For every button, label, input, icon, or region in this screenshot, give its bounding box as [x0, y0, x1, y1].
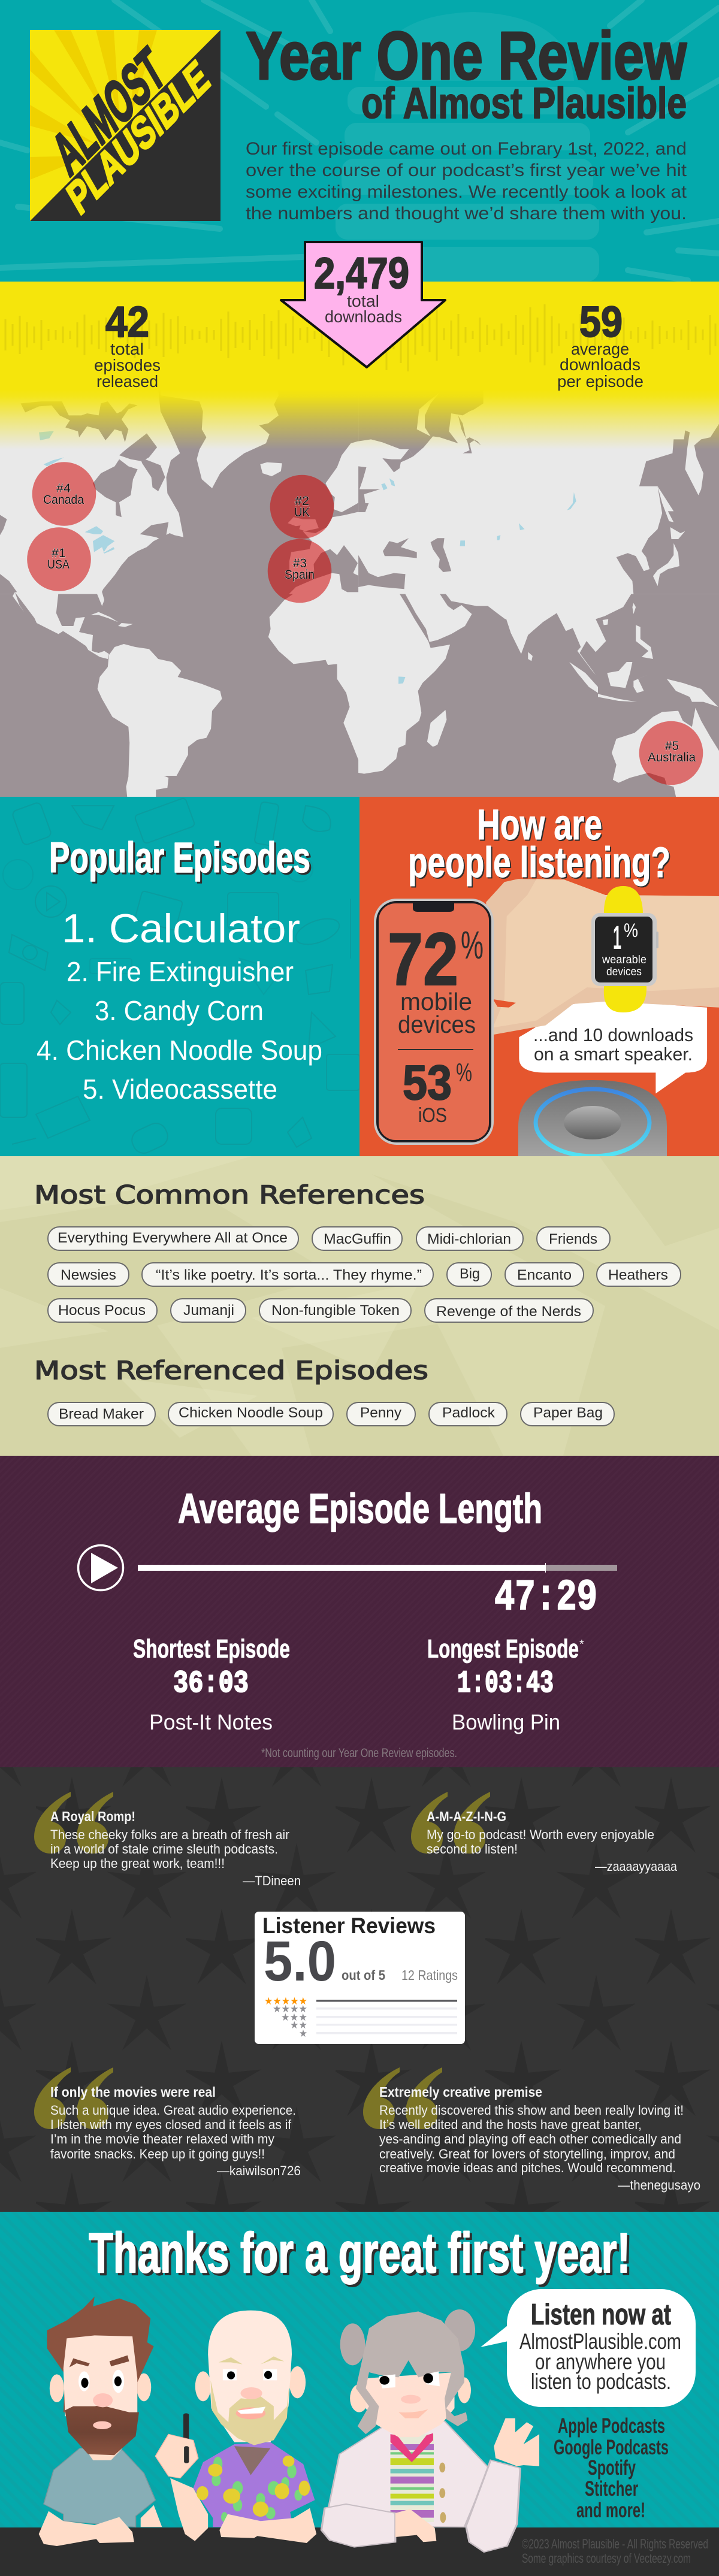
- pills: most referenced episodes: Chicken Noodle Soup: [179, 1405, 323, 1421]
- stat: 53 percent iOS: %: [456, 1059, 472, 1087]
- intro paragraph: the numbers and thought we’d share them with you.: [246, 204, 687, 223]
- review: A-M-A-Z-I-N-G: [411, 1792, 678, 1874]
- footer: [0, 2527, 719, 2576]
- intro paragraph: over the course of our podcast’s first year we’ve hit: [246, 161, 687, 180]
- stat: average downloads: 59: [579, 298, 623, 346]
- review: A Royal Romp: in a world of stale crime sleuth podcasts.: [50, 1842, 278, 1857]
- review: Extremely creative premise: Recently discovered this show and been really loving it!: [379, 2103, 684, 2118]
- episode ranking list: 2. Fire Extinguisher: [67, 956, 294, 987]
- review: Extremely creative premise: [363, 2067, 700, 2193]
- map marker: USA: [27, 527, 91, 591]
- arrow: total downloads: [281, 242, 445, 367]
- podcast platforms: Stitcher: [585, 2477, 638, 2501]
- stat: longest episode: Longest Episode: [427, 1634, 579, 1664]
- stat: average downloads: downloads: [560, 355, 641, 374]
- review: A-M-A-Z-I-N-G: second to listen!: [427, 1842, 518, 1857]
- intro paragraph: Our first episode came out on Febrary 1st, 2022, and: [246, 139, 687, 159]
- review: A Royal Romp: —TDineen: [243, 1873, 301, 1888]
- review: If only the movies were real: I’m in the movie theater relaxed with my: [50, 2131, 274, 2146]
- podcast platforms: and more!: [576, 2499, 645, 2522]
- panel: yellow stats band: [0, 282, 719, 391]
- pills: most referenced episodes: Paper Bag: [533, 1405, 603, 1421]
- pills: most common references: Revenge of the Nerds: [436, 1304, 581, 1320]
- pills: most referenced episodes: [48, 1402, 614, 1426]
- stat: 53 percent iOS: 53: [403, 1056, 452, 1110]
- pills: most common references: “It’s like poetry. It’s sorta... They rhyme.”: [156, 1267, 422, 1283]
- review: A-M-A-Z-I-N-G: A-M-A-Z-I-N-G: [427, 1809, 506, 1824]
- map marker: UK: UK: [294, 506, 310, 519]
- stat: total episodes: episodes: [94, 356, 161, 374]
- episode ranking list: 5. Videocassette: [83, 1074, 277, 1105]
- stat: 72 percent mobile: [388, 918, 484, 1038]
- stat: 72 percent mobile: devices: [398, 1011, 476, 1038]
- review: If only the movies were real: favorite snacks. Keep up it going guys!!: [50, 2146, 265, 2161]
- map marker: Australia: [639, 721, 703, 785]
- heading: average episode length: Average Episode Length: [178, 1485, 542, 1532]
- map marker: Canada: [32, 462, 96, 526]
- pills: most common references: MacGuffin: [324, 1231, 391, 1247]
- panel: popular episodes: [0, 797, 360, 1157]
- stat: 72 percent mobile: %: [461, 923, 484, 967]
- panel: thanks: [0, 2212, 719, 2527]
- logo: [30, 30, 220, 225]
- review: If only the movies were real: [34, 2067, 301, 2178]
- panel: header: [0, 0, 719, 282]
- pills: most common references: Non-fungible Token: [271, 1302, 400, 1319]
- ratings card: ★★★: [281, 2012, 307, 2024]
- pills: most common references: Everything Everywhere All at Once: [58, 1230, 288, 1246]
- illustration: host with purple shirt: [155, 2311, 316, 2543]
- heading: how are people listening: How are: [477, 802, 602, 849]
- stat: 53 percent iOS: [403, 1056, 472, 1127]
- map marker: Australia: #5: [665, 739, 679, 753]
- review: Extremely creative premise: It’s well edited and the hosts have great banter,: [379, 2117, 642, 2132]
- logo: PLAUSIBLE: [61, 51, 216, 225]
- ratings card: 12 Ratings: [401, 1967, 458, 1983]
- episode ranking list: 1. Calculator: [62, 906, 300, 951]
- map marker: UK: [270, 475, 334, 539]
- stat: shortest episode: Post-It Notes: [149, 1710, 273, 1734]
- map marker: Australia: Australia: [648, 751, 696, 764]
- icon: play button: [78, 1546, 123, 1590]
- map marker: Spain: [268, 539, 331, 603]
- review: A Royal Romp: A Royal Romp!: [50, 1809, 135, 1824]
- pills: most referenced episodes: Penny: [360, 1405, 401, 1421]
- review: Extremely creative premise: creatively. Great for lovers of storytelling, improv, and: [379, 2146, 675, 2161]
- stat: average downloads: per episode: [557, 372, 644, 391]
- stat: average downloads: [557, 298, 644, 391]
- stat: 72 percent mobile: 72: [388, 918, 458, 1001]
- map marker: UK: #2: [295, 494, 309, 508]
- review: Extremely creative premise: Extremely creative premise: [379, 2084, 542, 2100]
- speech bubble: listen now: or anywhere you: [535, 2350, 666, 2374]
- review: If only the movies were real: I listen with my eyes closed and it feels as if: [50, 2117, 292, 2132]
- review: If only the movies were real: If only the movies were real: [50, 2084, 216, 2100]
- ratings card: out of 5: [342, 1967, 385, 1983]
- heading: most referenced episodes: Most Referenced Episodes: [34, 1356, 428, 1385]
- illustration: arm and hand: [486, 879, 719, 1035]
- stat: 72 percent mobile: mobile: [400, 988, 472, 1015]
- review: If only the movies were real: Such a unique idea. Great audio experience.: [50, 2103, 296, 2118]
- heading: how are people listening: How are: [478, 803, 603, 850]
- stat: shortest episode: 36:03: [173, 1666, 249, 1701]
- stat: 1 percent wearable: %: [624, 920, 638, 941]
- ratings card: Listener Reviews: [262, 1913, 436, 1938]
- heading: popular episodes: Popular Episodes: [51, 836, 312, 884]
- pills: most common references: Jumanji: [183, 1302, 234, 1319]
- illustration: host with brown beard: [39, 2296, 162, 2546]
- review: A-M-A-Z-I-N-G: —zaaaayyaaaa: [595, 1859, 678, 1874]
- ratings card: ★★★★: [273, 2003, 307, 2015]
- pills: most common references: Big: [460, 1266, 480, 1282]
- average length value: 47:29: [494, 1573, 597, 1622]
- intro paragraph: [246, 139, 687, 223]
- stat: longest episode: Bowling Pin: [452, 1710, 560, 1734]
- speech bubble: smart speaker: [519, 1000, 707, 1093]
- illustration: host with gray hair: [321, 2309, 539, 2552]
- stat: longest episode: 1:03:43: [457, 1666, 554, 1701]
- stat: total episodes: [94, 298, 161, 391]
- arrow: total downloads: 2,479: [314, 249, 409, 298]
- stat: 1 percent wearable: devices: [606, 966, 642, 978]
- map marker: Spain: #3: [293, 557, 307, 570]
- speech bubble: smart speaker: on a smart speaker.: [534, 1044, 693, 1065]
- podcast platforms: Apple Podcasts: [558, 2414, 665, 2438]
- map marker: USA: #1: [52, 546, 66, 560]
- episode ranking list: 3. Candy Corn: [95, 995, 264, 1026]
- review: Extremely creative premise: creative movie ideas and pitches. Would recommend.: [379, 2160, 676, 2175]
- intro paragraph: some exciting milestones. We recently took a look at: [246, 182, 687, 202]
- pills: most referenced episodes: Bread Maker: [59, 1406, 144, 1422]
- panel: world map: [0, 388, 719, 798]
- review: A Royal Romp: Keep up the great work, team!!!: [50, 1856, 225, 1871]
- speech bubble: listen now: Listen now at: [531, 2299, 671, 2331]
- panel: episode length: [0, 1456, 719, 1767]
- ratings card: [255, 1912, 465, 2044]
- stat: 1 percent wearable: wearable: [602, 954, 647, 966]
- illustration: phone: [374, 899, 494, 1145]
- stat: total episodes: total: [110, 340, 144, 358]
- stat: longest episode: *: [579, 1638, 584, 1651]
- review: A Royal Romp: [34, 1792, 301, 1888]
- stat: total episodes: 42: [105, 298, 149, 346]
- stat: total episodes: released: [96, 372, 158, 391]
- review: If only the movies were real: —kaiwilson726: [217, 2163, 301, 2178]
- stat: 1 percent wearable: 1: [613, 918, 621, 956]
- speech bubble: listen now: listen to podcasts.: [531, 2369, 671, 2394]
- pills: most common references: Heathers: [608, 1267, 668, 1283]
- podcast platforms: Spotify: [588, 2456, 636, 2480]
- stat: 1 percent wearable: [602, 918, 647, 978]
- ratings card: 5.0: [264, 1930, 336, 1993]
- episode ranking list: 4. Chicken Noodle Soup: [37, 1035, 322, 1066]
- speech bubble: smart speaker: ...and 10 downloads: [533, 1024, 693, 1045]
- illustration: smart speaker: [518, 1080, 667, 1156]
- map marker: Spain: Spain: [285, 568, 315, 582]
- stat: 53 percent iOS: iOS: [418, 1104, 447, 1127]
- pills: most common references: Friends: [549, 1231, 597, 1247]
- illustration: smartwatch: [591, 886, 658, 1012]
- episode ranking list: [37, 906, 322, 1105]
- heading: popular episodes: Popular Episodes: [49, 835, 310, 882]
- speech bubble: listen now: [481, 2289, 696, 2407]
- ratings card: ★: [299, 2028, 307, 2040]
- pills: most common references: [48, 1227, 681, 1322]
- heading: how are people listening: [408, 802, 672, 888]
- panel: how are people listening: [360, 797, 719, 1156]
- review: A Royal Romp: These cheeky folks are a breath of fresh air: [50, 1827, 289, 1842]
- pills: most common references: Hocus Pocus: [58, 1302, 146, 1319]
- map marker: Canada: Canada: [43, 493, 84, 507]
- review: Extremely creative premise: yes-anding and playing off each other comedically and: [379, 2131, 681, 2146]
- review: A-M-A-Z-I-N-G: My go-to podcast! Worth every enjoyable: [427, 1827, 654, 1842]
- arrow: total downloads: downloads: [325, 307, 402, 326]
- panel: references: [0, 1156, 719, 1456]
- stat: shortest episode: [133, 1634, 290, 1734]
- stat: average downloads: average: [571, 340, 629, 358]
- map marker: Canada: #4: [56, 482, 71, 495]
- pills: most referenced episodes: Padlock: [442, 1405, 496, 1421]
- footnote: *Not counting our Year One Review episodes.: [261, 1746, 457, 1760]
- review: Extremely creative premise: —thenegusayo: [618, 2178, 700, 2193]
- pills: most common references: Midi-chlorian: [427, 1231, 511, 1247]
- stat: longest episode: [427, 1634, 584, 1734]
- map marker: USA: USA: [47, 558, 70, 572]
- ratings card: ★★: [290, 2019, 307, 2031]
- podcast platforms: [554, 2414, 669, 2522]
- stat: shortest episode: Shortest Episode: [133, 1634, 290, 1664]
- pills: most common references: Encanto: [517, 1267, 572, 1283]
- arrow: total downloads: total: [347, 292, 379, 310]
- heading: most common references: Most Common References: [34, 1180, 425, 1210]
- progress bar: [138, 1563, 617, 1573]
- panel: listener reviews: [0, 1767, 719, 2212]
- ratings card: ★★★★★: [264, 1996, 307, 2007]
- pills: most common references: Newsies: [61, 1267, 116, 1283]
